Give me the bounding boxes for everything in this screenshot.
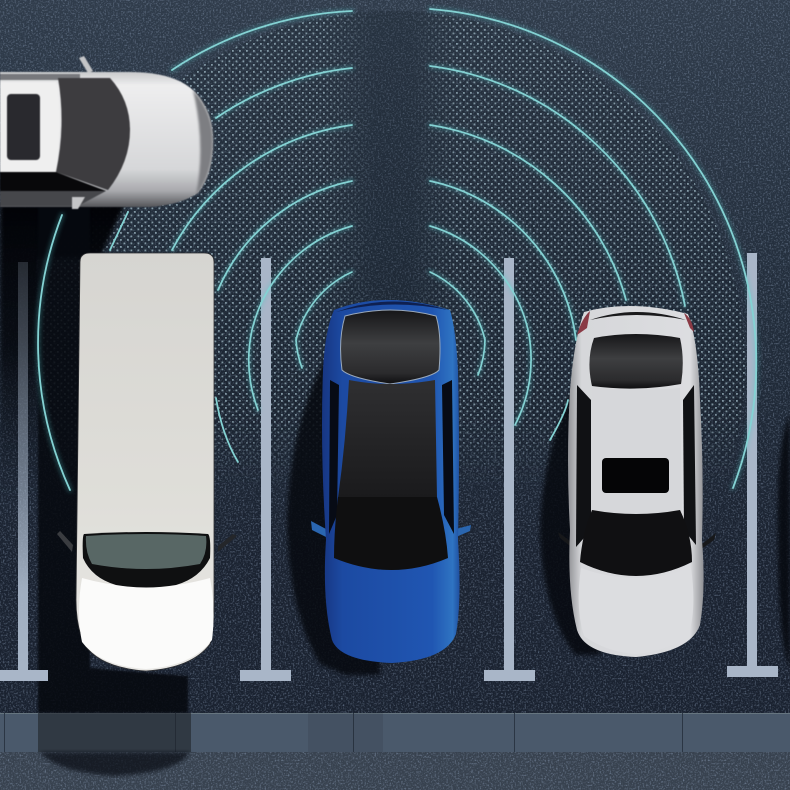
sensor wave arcs: [38, 9, 756, 490]
white car body: [568, 306, 704, 657]
van hood: [79, 578, 214, 669]
van mirrors: [57, 531, 73, 552]
white car roof: [591, 388, 682, 515]
parking bay lines: [0, 253, 778, 681]
fifth arc: [249, 226, 531, 425]
blue car: [311, 300, 471, 663]
sensor dot field: [37, 11, 745, 482]
side window: [0, 172, 106, 191]
white car tail lights: [577, 311, 590, 335]
van windshield: [83, 532, 210, 588]
front edge shading: [193, 90, 213, 195]
top white car: [0, 56, 213, 209]
lower sill: [0, 191, 106, 206]
white car side windows: [576, 385, 591, 547]
top car body: [0, 72, 213, 207]
third arc: [172, 125, 626, 300]
sunroof: [7, 94, 40, 160]
fourth arc: [216, 181, 576, 462]
blue car body: [322, 300, 460, 663]
blue car roof: [338, 380, 437, 498]
van: [57, 253, 237, 671]
blue car rear glass: [341, 310, 440, 384]
upper sill: [0, 74, 80, 80]
white car sunroof: [602, 458, 669, 493]
blue car mirrors: [311, 521, 326, 537]
arc glow: [38, 9, 756, 490]
white car hood: [579, 568, 693, 654]
shadow of blue car: [287, 350, 380, 675]
van body: [76, 253, 214, 671]
blue car spoiler: [336, 301, 448, 312]
white car: [558, 306, 716, 657]
outer arc: [38, 9, 756, 490]
lower road strip: [0, 752, 790, 790]
shadow of van: [38, 205, 188, 713]
blue car windshield: [334, 497, 448, 570]
shadow of white car: [540, 385, 600, 655]
dark shadow at far left below top car: [0, 204, 125, 500]
top car mirror lower: [72, 197, 85, 209]
white car mirrors: [558, 532, 575, 550]
blue car side windows: [329, 380, 339, 534]
roof: [0, 82, 60, 172]
shadow at right edge: [778, 415, 790, 670]
white car windshield: [580, 510, 692, 576]
windshield: [56, 78, 130, 190]
top car mirror upper: [79, 56, 93, 73]
white car spoiler: [590, 312, 686, 320]
curb: [0, 713, 790, 752]
second arc: [110, 66, 685, 306]
white car rear glass: [589, 334, 683, 389]
inner arc: [296, 272, 485, 375]
